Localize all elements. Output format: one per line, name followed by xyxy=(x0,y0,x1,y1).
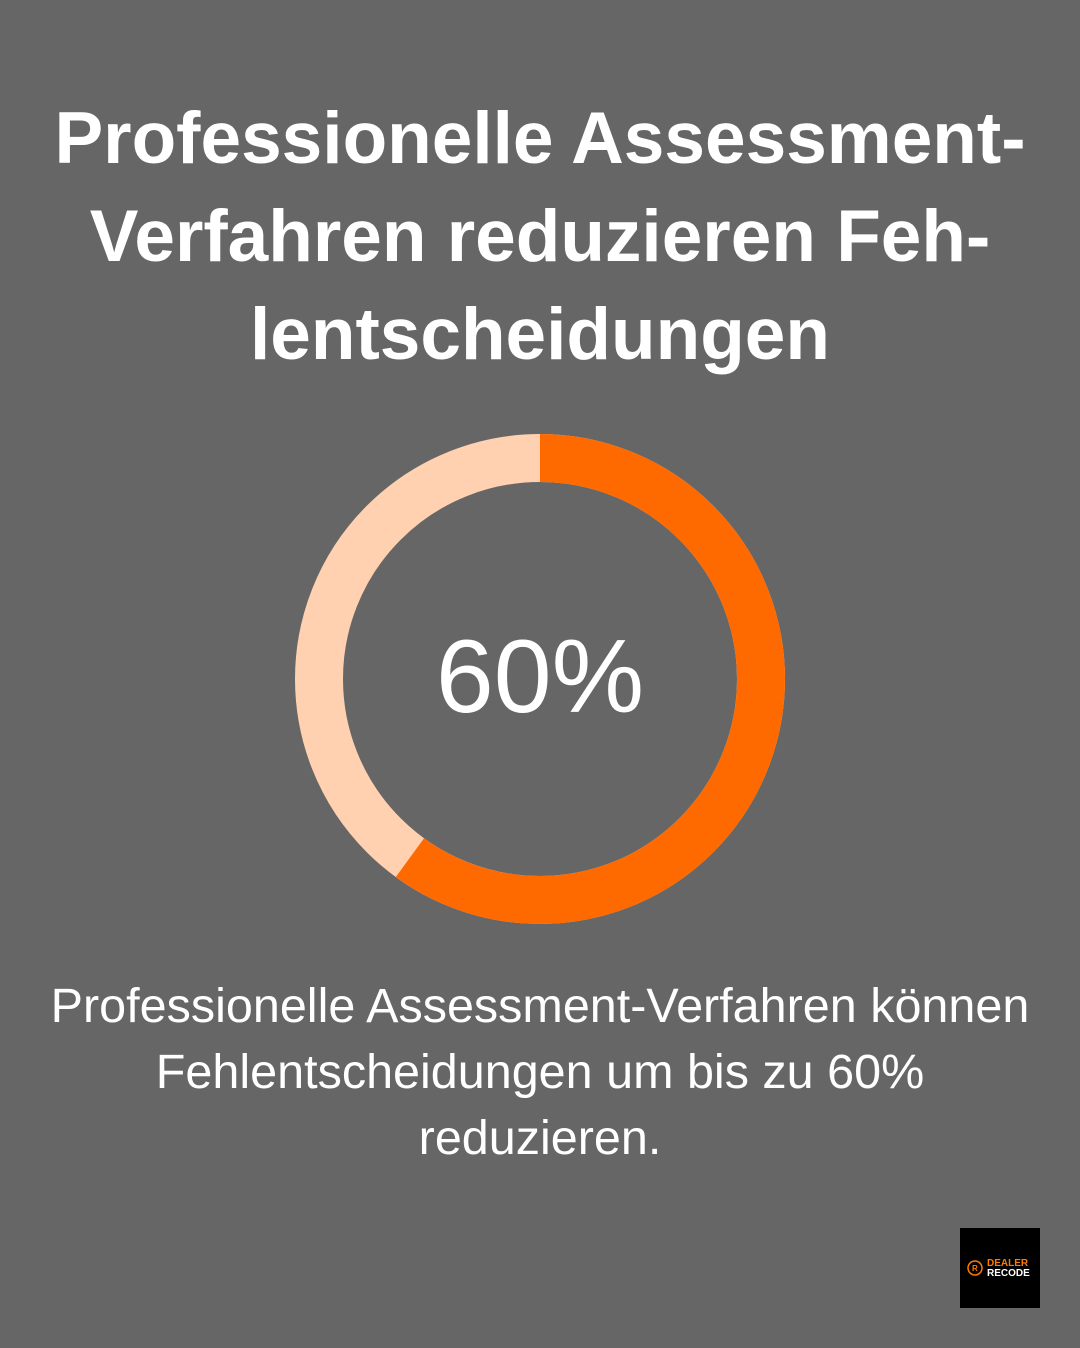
body text xyxy=(51,979,1029,1165)
body text: Fehlentscheidungen um bis zu 60% xyxy=(156,1045,924,1099)
title: Verfahren reduzieren Feh- xyxy=(90,196,990,277)
logo: R xyxy=(972,1264,978,1273)
title xyxy=(54,98,1026,375)
title: lentscheidungen xyxy=(250,294,830,375)
title: Professionelle Assessment- xyxy=(54,98,1026,179)
logo: DEALER xyxy=(987,1258,1029,1269)
body text: reduzieren. xyxy=(419,1111,661,1165)
logo: RECODE xyxy=(987,1268,1030,1279)
body text: Professionelle Assessment-Verfahren können xyxy=(51,979,1029,1033)
logo xyxy=(960,1228,1040,1308)
donut chart: 60% xyxy=(436,619,644,735)
